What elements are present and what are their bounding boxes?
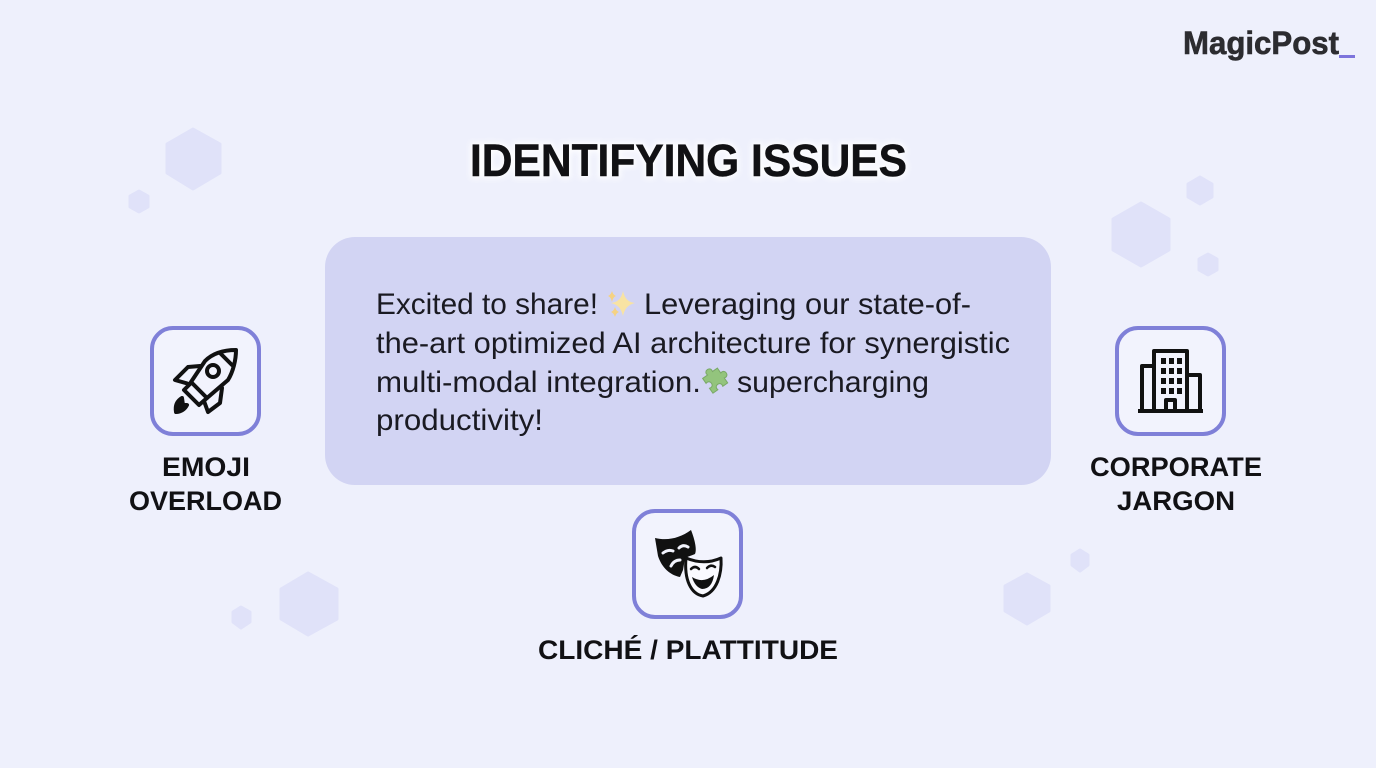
post text (376, 288, 1010, 437)
logo: MagicPost: MagicPost (1183, 25, 1339, 61)
label: emoji overload: OVERLOAD (129, 486, 282, 516)
panel: example post (325, 237, 1051, 485)
label: corporate jargon: CORPORATE (1090, 452, 1262, 482)
post text: multi-modal integration. (376, 366, 701, 399)
label: emoji overload (129, 452, 282, 516)
post text: productivity! (376, 404, 543, 437)
decorative hexagons (130, 129, 1217, 635)
icon card: theatre masks (634, 511, 741, 617)
label: corporate jargon (1090, 452, 1262, 516)
post text: Excited to share! (376, 288, 598, 321)
icon: theatre masks (655, 530, 721, 596)
post text: Leveraging our state-of- (644, 288, 971, 321)
icon card: rocket (152, 328, 259, 434)
icon: sparkles emoji (608, 291, 635, 317)
label: cliche / platitude: CLICHÉ / PLATTITUDE (538, 634, 838, 665)
post text: supercharging (737, 366, 929, 399)
icon card: building (1117, 328, 1224, 434)
title: IDENTIFYING ISSUES (470, 135, 907, 186)
icon: puzzle emoji (700, 362, 731, 393)
icon: office building (1138, 351, 1203, 411)
icon: rocket (175, 350, 236, 412)
post text: the-art optimized AI architecture for synergistic (376, 327, 1010, 360)
label: corporate jargon: JARGON (1117, 486, 1235, 516)
title: IDENTIFYING ISSUES (470, 135, 907, 186)
label: emoji overload: EMOJI (162, 452, 250, 482)
